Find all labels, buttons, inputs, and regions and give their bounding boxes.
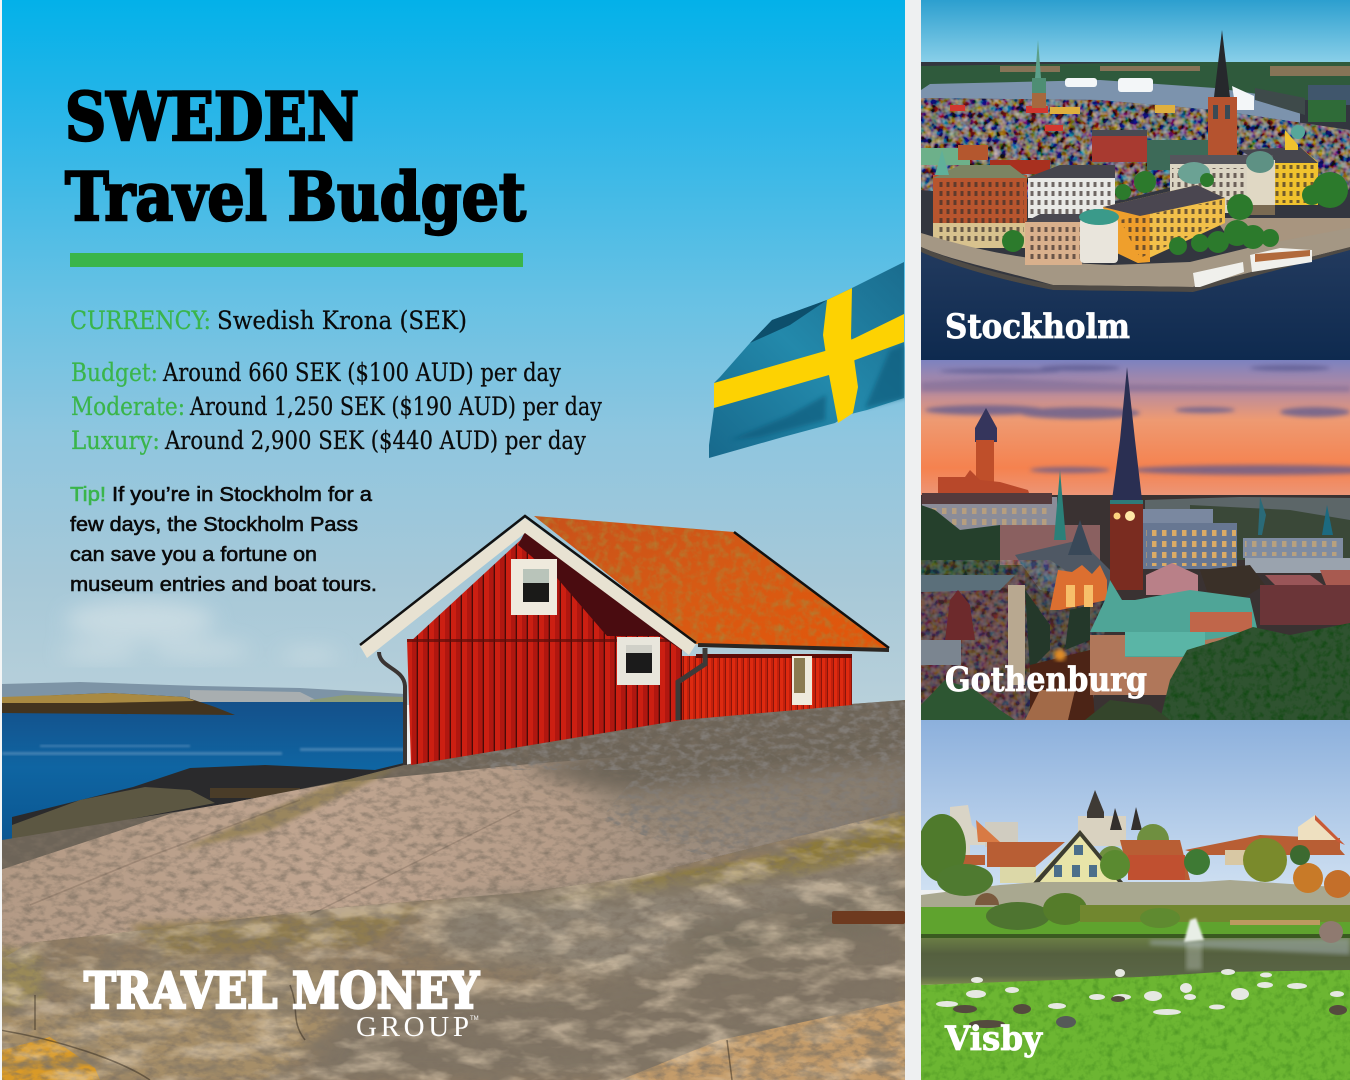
town wall xyxy=(921,880,1350,907)
sea xyxy=(2,702,407,847)
side towers xyxy=(1258,497,1266,535)
teal roofed building xyxy=(1090,580,1258,695)
logo: Travel Money Group xyxy=(84,961,480,1043)
pond xyxy=(921,937,1350,985)
lower rock xyxy=(0,810,905,1080)
foreground trees xyxy=(1160,623,1350,720)
Riddarholm tower xyxy=(1208,30,1237,157)
foreground grass xyxy=(921,970,1350,1080)
currency line: CURRENCY: xyxy=(70,306,211,335)
base xyxy=(921,62,1350,292)
mid roofs xyxy=(1146,563,1350,625)
logo: Travel Money Group: TRAVEL MONEY xyxy=(84,961,480,1020)
church hall xyxy=(1000,470,1110,600)
currency line xyxy=(70,306,467,335)
harbour water xyxy=(921,80,1300,122)
orange lichen xyxy=(2,1037,100,1080)
tip text: Tip! xyxy=(70,483,106,506)
far tower xyxy=(938,408,1030,496)
rusty pipe xyxy=(832,911,905,924)
fountain xyxy=(1184,918,1204,942)
sky xyxy=(921,0,1350,66)
grey mottled top xyxy=(524,750,905,803)
distant trees xyxy=(1098,824,1169,874)
cruise ships xyxy=(1065,78,1254,110)
panel: main photo xyxy=(0,0,910,1080)
base xyxy=(921,495,1350,720)
roof xyxy=(534,516,889,648)
logo: Travel Money Group: TM xyxy=(470,1016,479,1022)
cracks xyxy=(0,800,732,1080)
budget levels: Budget: xyxy=(71,358,158,387)
rock texture xyxy=(0,690,910,1080)
yellow gable house xyxy=(1032,830,1123,884)
label: Gothenburg xyxy=(945,660,1147,700)
water xyxy=(921,250,1350,360)
far shore xyxy=(921,62,1350,100)
tan boulder xyxy=(620,1000,905,1080)
main spire xyxy=(1110,367,1143,590)
title: Travel Budget xyxy=(65,158,526,236)
orange building xyxy=(1103,185,1225,263)
grey apartment blocks xyxy=(1143,509,1350,573)
trees xyxy=(918,814,1350,898)
white edge xyxy=(0,0,2,1080)
title xyxy=(65,78,526,236)
budget levels xyxy=(71,358,603,455)
white bargeboard xyxy=(360,518,696,658)
pink slab xyxy=(0,750,905,960)
flag xyxy=(709,262,904,458)
hedges xyxy=(986,893,1350,930)
label: Visby xyxy=(944,1019,1043,1059)
lawn behind pond xyxy=(921,907,1350,939)
title underline xyxy=(70,253,523,267)
house xyxy=(360,510,895,765)
rock ground xyxy=(0,690,910,1080)
white castle xyxy=(950,805,1018,855)
boats xyxy=(1193,248,1312,287)
trees xyxy=(1002,171,1348,255)
house right gable xyxy=(1298,815,1340,840)
title: SWEDEN xyxy=(65,78,359,156)
budget levels: Luxury: xyxy=(71,426,160,455)
birds xyxy=(936,969,1344,1015)
front wall xyxy=(407,639,682,765)
windows xyxy=(511,559,557,615)
cream domed buildings xyxy=(1170,151,1275,215)
grass strip xyxy=(606,812,905,892)
red brick building xyxy=(933,150,1027,248)
grey stone bands xyxy=(430,860,905,985)
gable wall xyxy=(413,540,665,639)
wooden plank xyxy=(210,788,300,798)
pink building xyxy=(1025,214,1082,265)
plaza xyxy=(1215,218,1350,250)
sky xyxy=(2,0,905,705)
German church spire xyxy=(1032,40,1046,108)
long building xyxy=(922,493,1057,532)
left city rooftops xyxy=(921,560,1111,720)
tip text: If you’re in Stockholm for a xyxy=(112,483,373,506)
panel: Stockholm photo xyxy=(921,0,1350,360)
budget levels: Around 1,250 SEK ($190 AUD) per day xyxy=(189,392,603,421)
mid buildings xyxy=(1092,132,1147,162)
near island xyxy=(2,693,235,715)
tip text xyxy=(70,483,377,596)
yellow right building xyxy=(1240,125,1318,205)
tip text: museum entries and boat tours. xyxy=(70,573,377,596)
boulder xyxy=(1319,921,1343,943)
clouds xyxy=(60,600,340,661)
label: Stockholm xyxy=(945,307,1130,347)
eaves xyxy=(698,645,889,650)
side wall xyxy=(682,656,852,720)
red roofs xyxy=(963,835,1345,880)
tip text: few days, the Stockholm Pass xyxy=(70,513,358,536)
quay edge xyxy=(921,247,1350,292)
round tower xyxy=(1079,209,1119,263)
olive rock hump xyxy=(12,787,215,838)
dark rock outcrop xyxy=(12,763,404,825)
sunset sky xyxy=(921,360,1350,510)
gable shadow xyxy=(518,532,690,655)
budget levels: Around 2,900 SEK ($440 AUD) per day xyxy=(164,426,587,455)
gutter pipes xyxy=(379,652,405,765)
logo: Travel Money Group: GROUP xyxy=(356,1011,469,1043)
clouds xyxy=(921,365,1350,475)
left trees xyxy=(921,505,1030,578)
budget levels: Around 660 SEK ($100 AUD) per day xyxy=(162,358,562,387)
quay xyxy=(921,228,1350,287)
glowing church window xyxy=(1050,565,1107,610)
white building xyxy=(1026,165,1115,218)
distant islands xyxy=(2,682,405,704)
tip text: can save you a fortune on xyxy=(70,543,317,566)
cream houses xyxy=(1000,867,1036,883)
currency line: Swedish Krona (SEK) xyxy=(217,306,467,335)
red roofs xyxy=(950,105,1063,131)
cathedral and towers xyxy=(1078,790,1142,846)
sea glints xyxy=(2,745,405,755)
budget levels: Moderate: xyxy=(71,392,185,421)
sky xyxy=(921,720,1350,890)
dark street trees xyxy=(1025,590,1050,670)
panel: Gothenburg photo xyxy=(921,360,1350,725)
horizon hills xyxy=(1145,497,1350,560)
street xyxy=(1025,690,1075,720)
old town mass xyxy=(921,98,1350,205)
panel: Visby photo xyxy=(918,720,1350,1080)
